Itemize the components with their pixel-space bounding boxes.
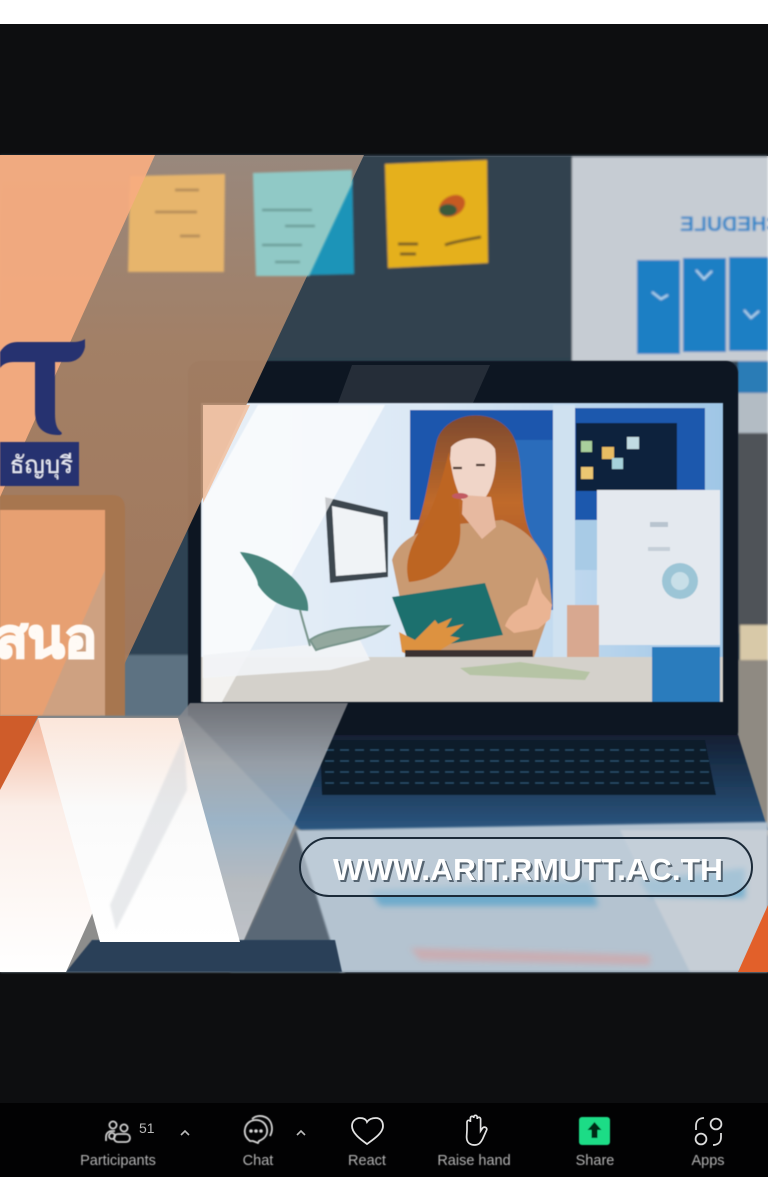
logo subtitle box: [0, 442, 79, 486]
office background: [201, 403, 723, 702]
logo subtitle: ธัญบุรี: [10, 452, 73, 480]
white abstract M shape: [0, 718, 240, 972]
blue cup: [652, 647, 720, 702]
laptop screen video: [201, 403, 723, 702]
black band below slide: [0, 972, 768, 1104]
right blue wall with notes: [575, 408, 705, 570]
woman neck: [462, 495, 496, 539]
wall: [0, 155, 768, 972]
woman hair back: [406, 415, 547, 590]
lighter orange band: [0, 155, 155, 497]
washed sticky notes: [128, 170, 352, 276]
logo letter T: [0, 339, 85, 435]
keyboard key rows: [325, 750, 713, 783]
chat label: Chat: [243, 1153, 273, 1169]
beige sticky: [128, 174, 225, 272]
woman face: [449, 438, 496, 505]
white bottom strip: [0, 1177, 768, 1200]
left orange wedge: [0, 716, 38, 795]
URL text: WWW.ARIT.RMUTT.AC.TH: [333, 852, 723, 887]
participants button: [106, 1121, 130, 1142]
share label: Share: [576, 1153, 614, 1169]
pale teal sticky: [253, 170, 352, 276]
left leg: [0, 718, 96, 972]
table left of paper: [0, 716, 345, 972]
raise hand label: Raise hand: [437, 1153, 511, 1169]
participant count: 51: [139, 1120, 155, 1136]
bottom toolbar: [0, 1103, 768, 1177]
white top strip: [0, 0, 768, 24]
react label: React: [348, 1153, 386, 1169]
hair front strand: [407, 452, 460, 582]
washed white strip over screen: [203, 405, 385, 702]
holding hand: [399, 618, 464, 660]
translucent light strip over laptop bezel: [338, 365, 490, 403]
pale column: [553, 405, 575, 660]
woman blouse: [392, 520, 552, 663]
URL shadow: WWW.ARIT.RMUTT.AC.TH: [335, 854, 725, 889]
pink cabinet: [567, 605, 599, 663]
URL pill: [300, 838, 752, 896]
whiteboard with chart: [597, 490, 720, 645]
keyboard keys: [320, 740, 716, 795]
blue shelf panel: [410, 410, 553, 520]
paper foreground: [296, 822, 768, 972]
teal sticky note: [253, 170, 354, 276]
laptop body: [188, 361, 768, 830]
room lower right: [738, 433, 768, 633]
mouth: [452, 493, 468, 499]
tablet card shape: [0, 495, 125, 716]
table: [0, 655, 190, 717]
desktop monitor: [325, 497, 388, 583]
participants caret: [181, 1131, 189, 1135]
raised hand: [505, 577, 552, 633]
plant leaf: [240, 552, 388, 650]
papers on desk: [203, 640, 370, 678]
yellow sticky note: [385, 160, 488, 268]
keyboard deck: [188, 735, 768, 830]
dark base under white shape: [66, 940, 342, 972]
tan overlay panel: [0, 155, 364, 716]
washed peach tint on screen: [203, 405, 250, 503]
logo mark: [0, 339, 85, 486]
tablet: [392, 583, 503, 650]
dark skirt: [405, 650, 533, 662]
raise hand icon: [467, 1115, 487, 1145]
grey strip below screen: [178, 703, 348, 942]
slide photo background: [0, 155, 768, 972]
shaded crossing stroke: [110, 735, 187, 930]
participants label: Participants: [80, 1153, 156, 1169]
apps icon: [696, 1118, 721, 1145]
eyes: [453, 465, 485, 468]
chat button: [245, 1116, 272, 1143]
chat caret: [297, 1131, 305, 1135]
black band above slide: [0, 24, 768, 156]
schedule board: [572, 157, 768, 433]
desk: [201, 657, 723, 702]
open notebook: [460, 662, 590, 680]
right leg: [38, 718, 240, 942]
react heart: [352, 1118, 383, 1144]
dark table shadow: [230, 830, 345, 972]
share button: [579, 1117, 610, 1145]
apps label: Apps: [691, 1153, 725, 1169]
orange corner: [738, 905, 768, 972]
